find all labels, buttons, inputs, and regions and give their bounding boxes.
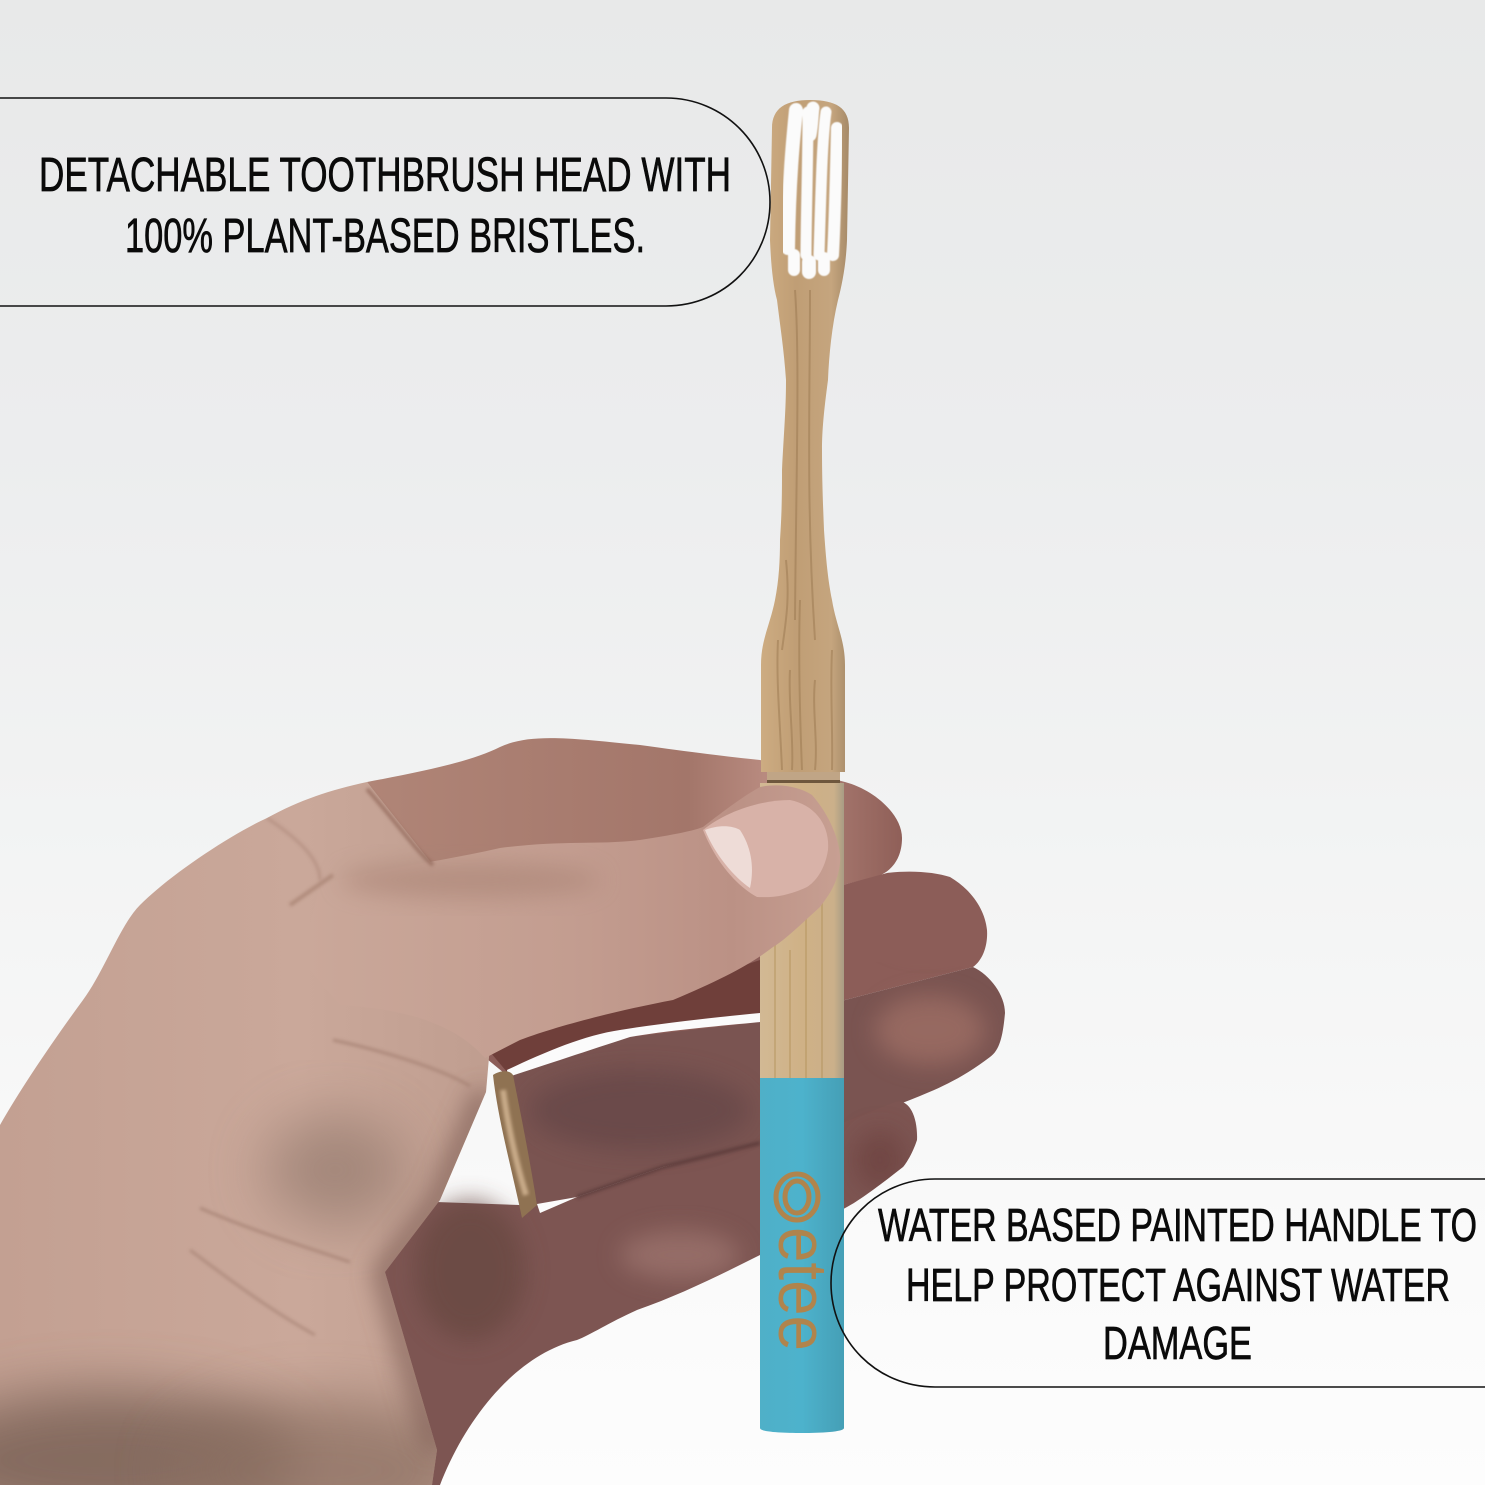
finger shading	[415, 892, 985, 1340]
thumb over brush	[290, 785, 840, 1058]
callout: toothbrush head	[0, 98, 770, 306]
handle collar	[767, 772, 840, 781]
bristles	[788, 108, 837, 272]
middle finger	[470, 872, 987, 1078]
ring finger	[500, 967, 1005, 1213]
index finger	[367, 738, 902, 900]
callout text line 3: DAMAGE	[1103, 1317, 1252, 1369]
etee logo text: etee	[764, 1227, 842, 1351]
small gap below ring	[537, 1197, 577, 1213]
wedding ring	[493, 1071, 537, 1218]
pinky finger	[380, 1101, 917, 1485]
hand: fingers behind the brush	[367, 738, 1005, 1485]
callout: painted handle	[831, 1179, 1485, 1387]
back of hand and palm	[0, 782, 500, 1485]
callout text line 2: 100% PLANT-BASED BRISTLES.	[125, 210, 645, 263]
callout text line 1: DETACHABLE TOOTHBRUSH HEAD WITH	[39, 149, 731, 202]
thumbnail	[703, 800, 828, 897]
blue painted handle	[760, 1078, 844, 1433]
etee logo mark	[776, 1174, 818, 1220]
gap between thumb and fingers	[507, 1013, 760, 1077]
detachable head and neck	[761, 100, 849, 772]
toothbrush	[760, 100, 849, 1433]
bamboo handle	[760, 783, 844, 1080]
bamboo grain	[777, 290, 832, 770]
nail lunula	[705, 826, 752, 888]
dark band under the thumb	[480, 960, 760, 1072]
shading on hand	[265, 1115, 405, 1225]
thumb shading	[340, 862, 600, 898]
